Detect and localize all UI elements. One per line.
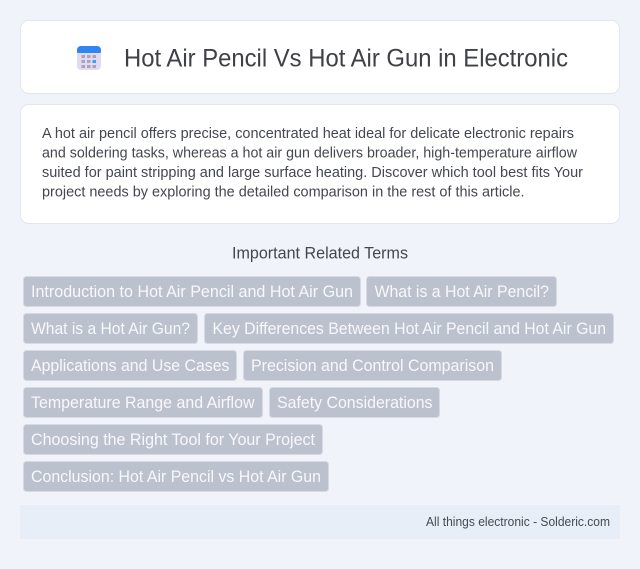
chip: introduction <box>24 276 360 306</box>
chip: choosing <box>24 424 322 454</box>
related term chips <box>24 276 614 492</box>
chip: conclusion: Conclusion: Hot Air Pencil vs Hot Air Gun <box>31 468 321 486</box>
chip: precision: Precision and Control Comparison <box>251 357 494 375</box>
footer text: All things electronic - Solderic.com <box>426 515 610 529</box>
chip: what is a hot air gun <box>24 314 198 344</box>
chip: what is a hot air pencil <box>366 276 556 306</box>
intro text block: suited for paint stripping and large surface heating. Discover which tool best fits Your <box>42 164 583 181</box>
intro text block: project needs by exploring the detailed comparison in the rest of this article. <box>42 184 524 200</box>
chip: precision <box>244 350 502 380</box>
intro text block: and soldering tasks, whereas a hot air gun delivers broader, high-temperature airflow <box>42 144 577 162</box>
chip: applications: Applications and Use Cases <box>31 357 230 375</box>
chip: applications <box>24 350 236 380</box>
chip: temperature: Temperature Range and Airflow <box>31 394 255 412</box>
chip: safety <box>270 388 440 418</box>
icon: calendar <box>77 46 101 70</box>
chip: what is a hot air pencil: What is a Hot Air Pencil? <box>374 283 549 301</box>
chip: temperature <box>24 388 262 418</box>
chip: key differences <box>204 314 614 344</box>
footer bar <box>20 505 620 539</box>
intro text block: A hot air pencil offers precise, concentrated heat ideal for delicate electronic repairs <box>42 125 574 142</box>
chip: introduction: Introduction to Hot Air Pencil and Hot Air Gun <box>31 283 353 301</box>
panel: intro paragraph <box>20 104 620 224</box>
chip: key differences: Key Differences Between Hot Air Pencil and Hot Air Gun <box>212 320 606 338</box>
title: Hot Air Pencil Vs Hot Air Gun in Electronic <box>124 44 568 72</box>
header panel <box>20 20 620 94</box>
heading: important related terms: Important Related Terms <box>232 244 408 262</box>
intro text block <box>42 125 583 200</box>
chip: safety: Safety Considerations <box>277 394 432 412</box>
chip: choosing: Choosing the Right Tool for Your Project <box>31 431 315 449</box>
chip: what is a hot air gun: What is a Hot Air Gun? <box>31 320 190 338</box>
chip: conclusion <box>24 462 328 492</box>
